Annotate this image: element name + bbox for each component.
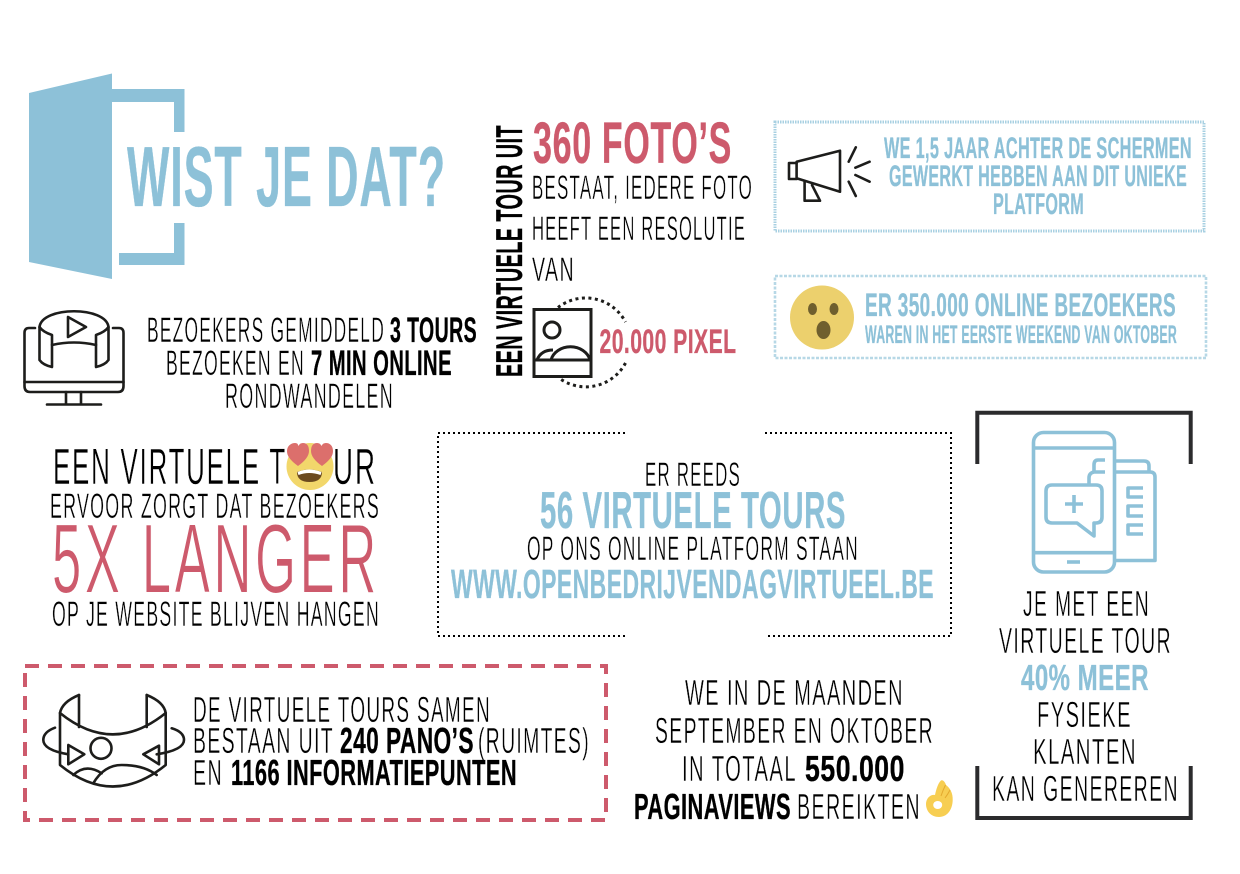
panel: right bracket frame [977,413,1191,818]
text block: 5x longer: OP JE WEBSITE BLIJVEN HANGEN [52,595,380,634]
text: visitors copy [865,287,1177,349]
icon: open door with bracket frame [29,74,184,279]
text: pano copy: 240 PANO’S [340,720,474,761]
icon: surprised emoji [790,286,854,350]
text block: page views: SEPTEMBER EN OKTOBER [655,710,934,751]
text: platform copy [451,456,934,607]
panel: online visitors [775,276,1206,358]
text: panel copy [884,132,1192,221]
text block: 360 photos: HEEFT EEN RESOLUTIE [532,210,746,248]
text block: tours and online time: 7 MIN ONLINE [311,344,452,383]
text block: page views: 550.000 [805,748,905,789]
text block: 5x longer: 5X LANGER [52,504,380,614]
text block: tours and online time: BEZOEKERS GEMIDDELD [147,311,385,350]
text block: page views: PAGINAVIEWS [634,786,791,827]
text: BESTAAT, IEDERE FOTO [532,169,753,207]
icon: phone with social [1034,432,1155,572]
text block: page views: WE IN DE MAANDEN [685,672,904,713]
text: pano copy: 1166 INFORMATIEPUNTEN [231,752,517,793]
text block: 5x longer: UR [333,438,377,495]
panel: behind the scenes [775,122,1204,231]
icon: photo with dotted circle [534,298,626,387]
panel: red dashed box [25,666,606,820]
label: 20.000 pixel: 20.000 PIXEL [600,323,736,361]
panel: dotted box [438,433,951,636]
text: platform copy: OP ONS ONLINE PLATFORM STAAN [527,530,859,568]
icon: ok hand emoji [926,780,953,817]
icon: heart eyes emoji [286,443,334,490]
text: platform copy: ER REEDS [645,456,741,494]
text block: 360 photos: 360 FOTO’S [533,111,732,176]
text block: 40% more clients: FYSIEKE [1037,694,1132,735]
text: panel copy: PLATFORM [993,188,1084,221]
text block: 5x longer: ERVOOR ZORGT DAT BEZOEKERS [50,487,380,526]
text block: tours and online time [147,311,477,416]
text: platform copy: 56 VIRTUELE TOURS [540,482,846,540]
text: pano copy: (RUIMTES) [478,720,590,761]
text block: 360 photos: VAN [532,251,575,289]
text block: 5x longer: EEN VIRTUELE T [53,438,287,495]
text block: page views: BEREIKTEN [797,786,921,827]
text: pano copy: DE VIRTUELE TOURS SAMEN [193,689,491,730]
text block: tours and online time: BEZOEKEN EN [166,344,305,383]
text: pano copy [193,689,590,793]
text block: 40% more clients: KLANTEN [1033,731,1137,772]
text block: 5x longer [50,438,380,634]
text block: tours and online time: RONDWANDELEN [225,377,394,416]
text block: page views [634,672,934,827]
text: pano copy: EN [193,752,223,793]
text block: 40% more clients: 40% MEER [1021,657,1149,698]
text block: tours and online time: 3 TOURS [390,311,477,350]
text block: 360 photos [532,111,753,289]
text block: page views: IN TOTAAL [682,748,797,789]
icon: monitor with panorama [24,311,124,404]
text block: 40% more clients [992,583,1179,809]
title: WIST JE DAT? [127,130,446,225]
icon: panorama ring [43,695,184,786]
text: pano copy: BESTAAN UIT [193,720,334,761]
icon: megaphone [789,147,870,201]
